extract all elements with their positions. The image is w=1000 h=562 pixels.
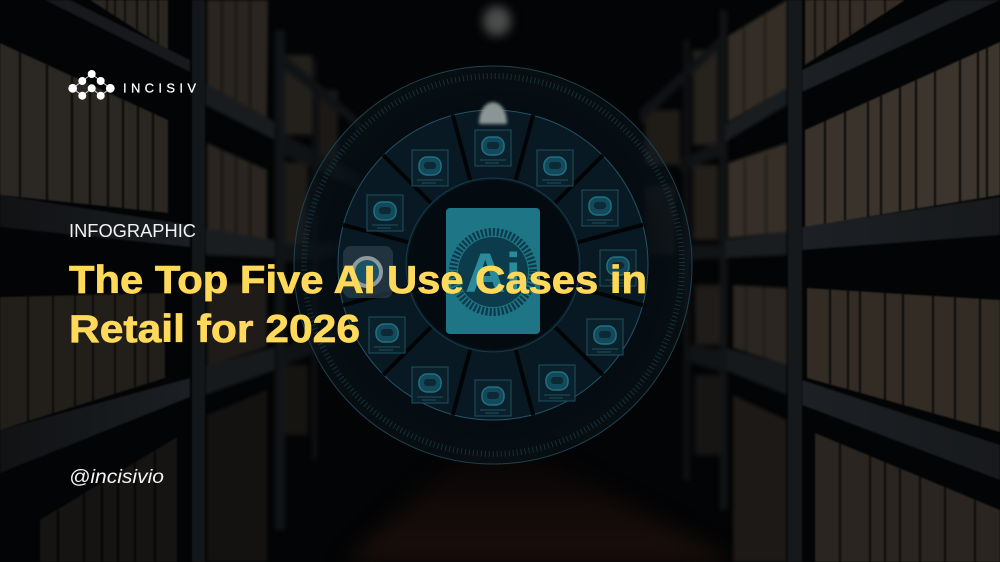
gear center (458, 237, 528, 307)
bookshelf: left main bay (0, 0, 190, 562)
ceiling lamp (483, 6, 511, 36)
bookshelf: right second bay (725, 0, 787, 562)
logo (68, 70, 196, 100)
floor (345, 445, 735, 562)
outer disc (294, 66, 692, 464)
reflected lamp (479, 102, 507, 124)
social handle: @incisivio (69, 467, 164, 488)
far left bays (275, 30, 360, 530)
shelves right (802, 0, 1000, 92)
eyebrow: INFOGRAPHIC (69, 221, 196, 241)
upright: right (788, 0, 802, 562)
center card (446, 208, 540, 334)
white badge (343, 246, 393, 298)
upright: left (192, 0, 205, 562)
title: Retail for 2026 (69, 308, 360, 351)
logo wordmark: INCISIV (123, 80, 196, 96)
segment dividers (343, 115, 643, 415)
inner dark hub (408, 180, 578, 350)
Ai label: Ai (465, 241, 521, 304)
bookshelf: left second bay (205, 0, 275, 562)
bookshelf: right main bay (802, 0, 1000, 562)
far right bays (640, 10, 727, 510)
AI wheel (294, 66, 692, 464)
segment ring (373, 145, 613, 385)
ring outlines (338, 110, 648, 420)
title (69, 259, 647, 351)
tick ring (304, 76, 682, 454)
title: The Top Five AI Use Cases in (69, 259, 647, 302)
shelves left (45, 0, 190, 72)
logo mark (68, 70, 115, 100)
icon tiles (475, 130, 511, 166)
gear ring (453, 232, 533, 312)
